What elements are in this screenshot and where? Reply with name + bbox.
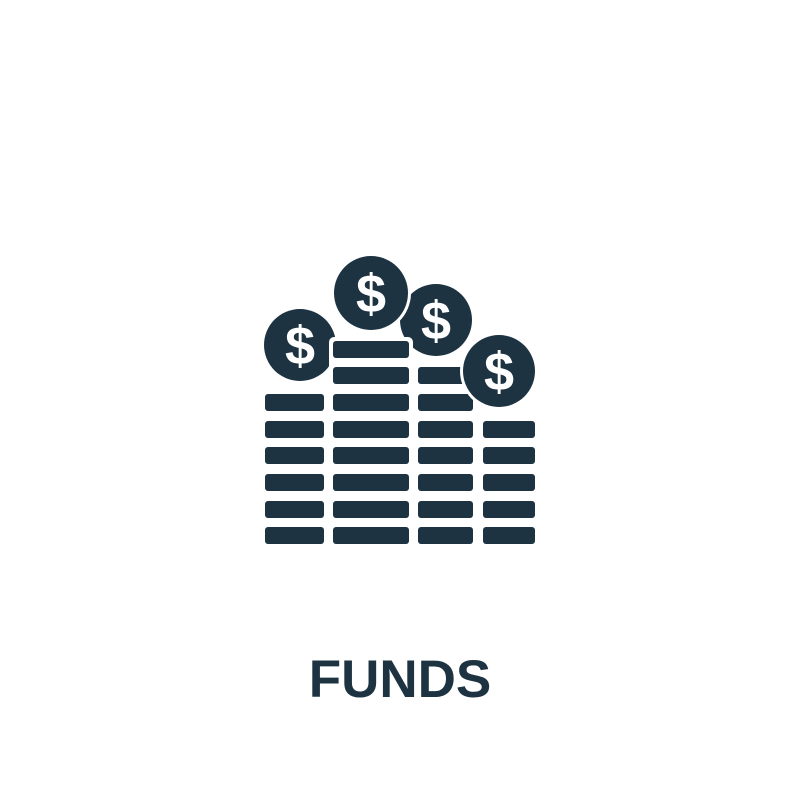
- column 1 bars: [265, 394, 324, 544]
- coin 3: $: [421, 291, 451, 351]
- column 2 bars: [329, 337, 413, 548]
- coin 4: [460, 332, 538, 410]
- column 4 bars: [483, 421, 535, 544]
- coin 1: [261, 306, 339, 384]
- coin 1: $: [285, 316, 315, 376]
- coin 4: $: [484, 342, 514, 402]
- column 3 bars: [418, 367, 473, 544]
- coin 3: [397, 281, 475, 359]
- title: FUNDS: FUNDS: [309, 650, 491, 709]
- coin 2 top: [331, 253, 411, 333]
- coin 2 top: $: [356, 264, 386, 324]
